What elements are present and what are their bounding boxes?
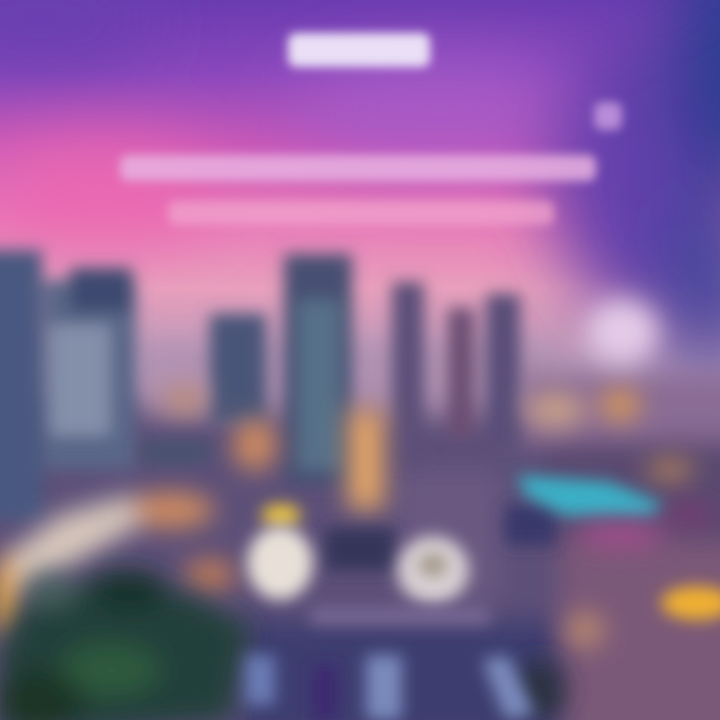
small logo icon — [594, 102, 622, 130]
white dome right — [586, 300, 658, 364]
glowing city lights — [0, 386, 694, 648]
foreground trees — [0, 570, 565, 720]
road streaks — [245, 608, 535, 720]
headline line 1 — [120, 155, 596, 181]
yellow light bottom right — [661, 586, 720, 620]
turquoise pool — [518, 475, 665, 516]
city lower ground — [0, 345, 720, 720]
dark road blocks — [140, 440, 555, 570]
magenta lights — [575, 505, 716, 546]
headline line 2 — [168, 201, 554, 225]
round icon right — [397, 536, 469, 604]
skyscrapers — [0, 250, 520, 520]
round icon left — [247, 504, 313, 600]
title block — [288, 33, 430, 67]
